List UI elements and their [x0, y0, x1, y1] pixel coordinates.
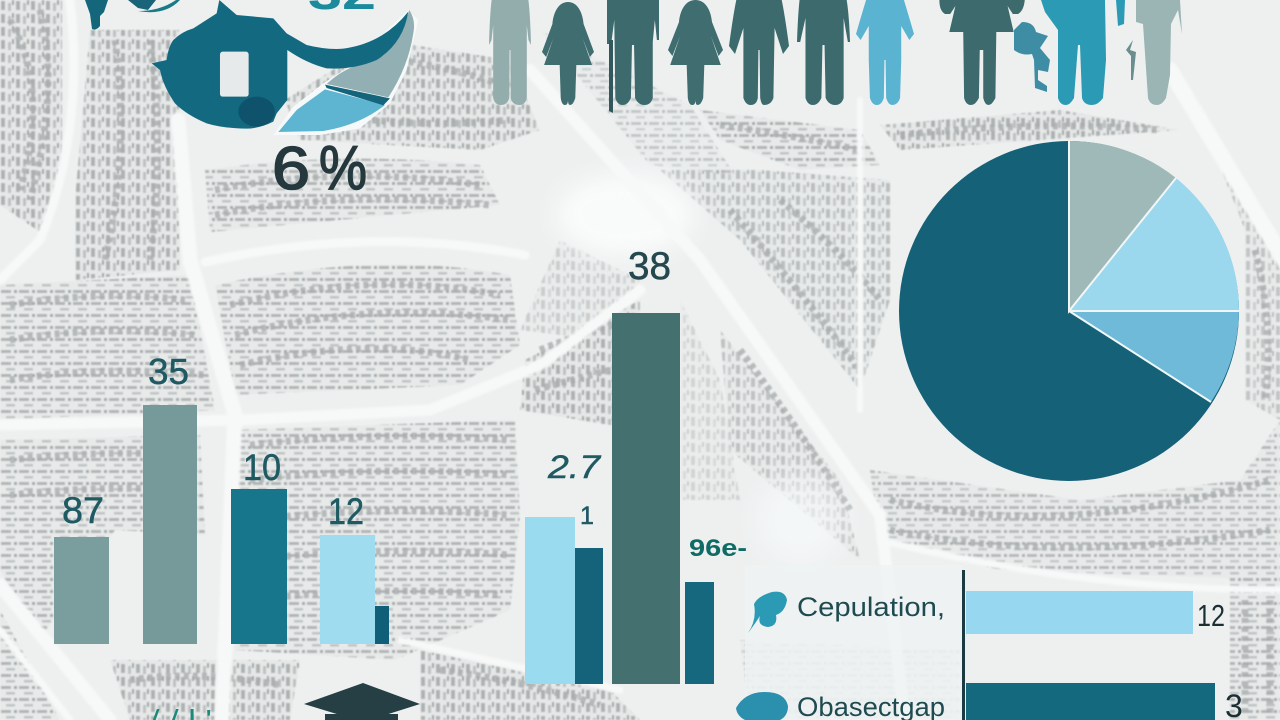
- blob shadow: [238, 97, 275, 127]
- axis line: [962, 570, 965, 720]
- wedge halo: [273, 10, 418, 135]
- person 5: [729, 0, 789, 105]
- bar 87: [54, 537, 109, 644]
- icon: characteristic: [736, 692, 788, 720]
- person 2: [542, 2, 594, 105]
- label 38: 38: [628, 245, 671, 288]
- bar chart: middle: [525, 245, 747, 684]
- person 9: [1014, 0, 1125, 105]
- pie chart: [899, 141, 1239, 481]
- label 10: 10: [243, 447, 281, 488]
- person 7: [856, 0, 914, 105]
- bar small: [375, 606, 389, 644]
- bar 12: [320, 535, 375, 644]
- panel: horizontal legend bars: [736, 565, 1243, 720]
- bar right: [685, 582, 714, 684]
- house window: [220, 52, 249, 97]
- icon: partial crescent ornament: [128, 0, 180, 12]
- icon: partial top-left pin: [85, 0, 108, 30]
- bar 10: [231, 489, 287, 644]
- slice: grey: [1069, 141, 1176, 311]
- label 1: 1: [580, 502, 594, 530]
- slice: mid blue: [1069, 311, 1239, 402]
- bar: characteristic: [966, 683, 1215, 720]
- label 35: 35: [148, 351, 189, 392]
- person 1: [489, 0, 531, 105]
- icon: graduation cap: [304, 683, 420, 720]
- icon: population: [748, 592, 787, 633]
- bar chart: left: [54, 351, 389, 644]
- percent sign: %: [319, 134, 367, 203]
- value: population: 12: [1197, 598, 1225, 633]
- stat: 6 percent: [272, 134, 367, 203]
- label 12: 12: [328, 491, 364, 532]
- row of people pictograms: [489, 0, 1182, 113]
- legend panel background: [745, 565, 962, 720]
- person 4: [668, 0, 723, 105]
- label garbled: 96e-: [689, 535, 747, 562]
- wedge: light blue: [278, 89, 385, 132]
- bar 35: [143, 405, 197, 644]
- person 8: [939, 0, 1025, 105]
- icon: whale-shaped house and wedge emblem: [152, 0, 418, 135]
- label 2.7: 2.7: [547, 449, 601, 485]
- digit 6: 6: [272, 135, 310, 202]
- person 6: [797, 0, 850, 105]
- bar: population: [966, 591, 1193, 634]
- label: population: Cepulation,: [797, 592, 945, 622]
- slice dividers: [1069, 141, 1239, 402]
- person 3: [607, 0, 659, 113]
- wedge: dark stripe: [325, 85, 390, 105]
- bar pale blue: [525, 517, 575, 684]
- person 10: [1126, 0, 1182, 105]
- dark teal blob: [152, 0, 408, 129]
- label 87: 87: [62, 490, 104, 531]
- slice: pale blue: [1069, 178, 1239, 311]
- wedge: grey: [327, 10, 414, 97]
- bar dark: [575, 548, 603, 684]
- bar tall: [612, 313, 680, 684]
